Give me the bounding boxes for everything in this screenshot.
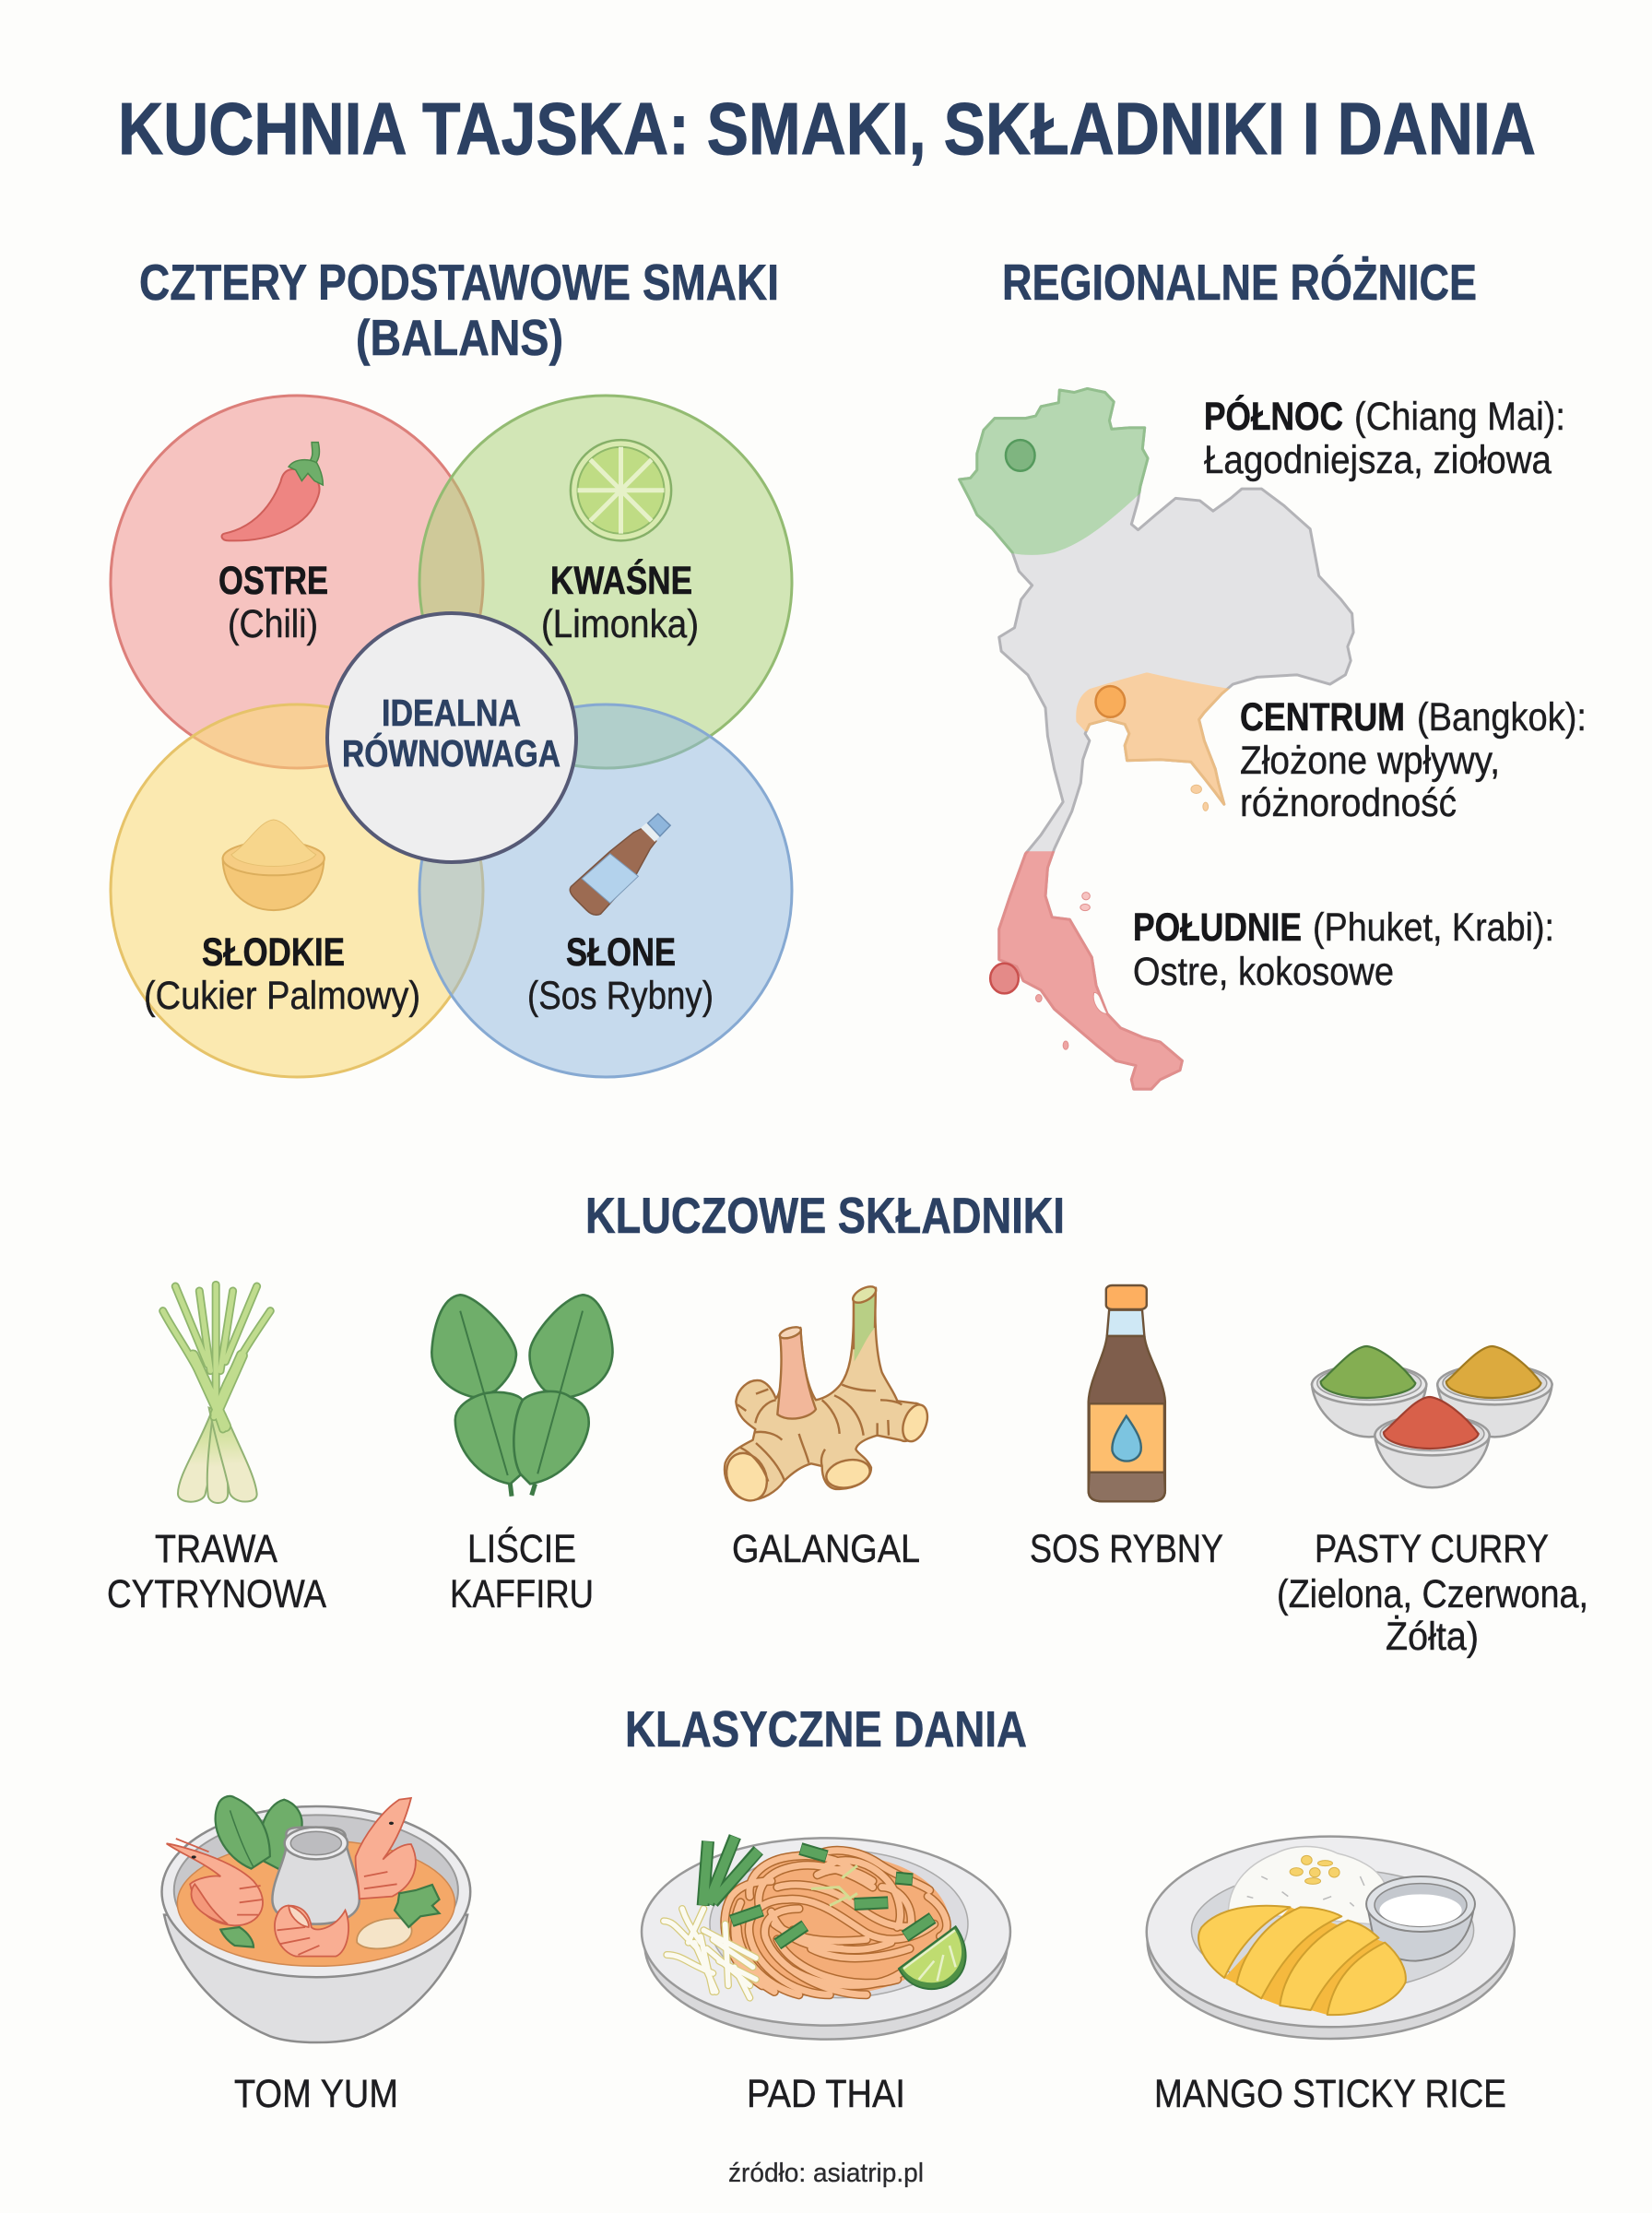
label: lemongrass: CYTRYNOWA <box>107 1572 326 1616</box>
dish: mango sticky rice <box>1147 1837 1515 2039</box>
label: sweet <box>144 930 420 1018</box>
label: curry pastes <box>1277 1527 1588 1659</box>
icon: lime <box>571 440 671 540</box>
icon: lemongrass <box>163 1284 270 1503</box>
label: lemongrass: TRAWA <box>155 1527 277 1571</box>
mango slices <box>1198 1906 1406 2015</box>
region text: north <box>1204 394 1565 482</box>
region text: south <box>1133 905 1554 994</box>
icon: galangal <box>719 1284 932 1508</box>
label: kaffir leaves: LIŚCIE <box>467 1526 576 1571</box>
heading: key ingredients: KLUCZOWE SKŁADNIKI <box>585 1187 1065 1244</box>
label: sweet: SŁODKIE <box>202 930 345 975</box>
label: mango sticky rice: MANGO STICKY RICE <box>1154 2072 1506 2116</box>
label: sour <box>541 558 699 646</box>
label: salty: SŁONE <box>566 930 676 975</box>
region text: central: Złożone wpływy, <box>1240 739 1500 783</box>
bean sprouts <box>664 1909 756 1998</box>
region text: central: (Bangkok): <box>1417 695 1587 740</box>
region: north <box>958 387 1149 555</box>
heading: four tastes <box>139 254 779 366</box>
marker: Phuket <box>990 964 1019 993</box>
panel: taste venn diagram <box>111 396 792 1077</box>
label: kaffir leaves: KAFFIRU <box>450 1572 594 1616</box>
region text: south: POŁUDNIE <box>1133 905 1302 950</box>
marker: Bangkok <box>1096 686 1125 717</box>
region text: north: Łagodniejsza, ziołowa <box>1204 438 1552 482</box>
region text: north: PÓŁNOC <box>1204 394 1343 439</box>
shrimp front <box>275 1906 348 1957</box>
label: curry pastes: PASTY CURRY <box>1315 1527 1549 1571</box>
labels: ingredients <box>107 1526 1588 1659</box>
herb piece <box>220 1927 254 1947</box>
icon: sugar bowl <box>223 820 324 910</box>
shrimp left <box>167 1839 263 1925</box>
lime wedge <box>899 1926 966 1989</box>
region text: central: różnorodność <box>1240 781 1457 825</box>
label: pad thai: PAD THAI <box>747 2072 905 2116</box>
bowl: yellow paste <box>1437 1346 1552 1437</box>
label: fish sauce: SOS RYBNY <box>1030 1527 1223 1571</box>
coconut milk bowl <box>1366 1876 1475 1961</box>
label: salty: (Sos Rybny) <box>527 974 714 1018</box>
circle: sour <box>419 396 792 768</box>
shrimp right <box>356 1798 416 1899</box>
label: curry pastes: (Zielona, Czerwona, <box>1277 1572 1588 1616</box>
marker: Chiang Mai <box>1006 440 1035 471</box>
label: spicy <box>218 559 328 646</box>
center circle: ideal balance: RÓWNOWAGA <box>342 732 560 775</box>
icon: fish sauce bottle <box>1089 1285 1165 1501</box>
mushroom <box>357 1918 412 1948</box>
sticky rice <box>1229 1846 1385 1924</box>
label: sweet: (Cukier Palmowy) <box>144 974 420 1018</box>
bowl: red paste <box>1375 1397 1490 1487</box>
icon: salty bottle <box>570 813 670 915</box>
basil leaves <box>216 1796 302 1872</box>
map of Thailand <box>960 388 1353 1089</box>
heading: four tastes: CZTERY PODSTAWOWE SMAKI <box>139 254 779 311</box>
region: south <box>997 851 1184 1091</box>
label: salty <box>527 930 714 1018</box>
source note: źródło: asiatrip.pl <box>728 2159 924 2188</box>
hot pot chimney <box>272 1828 360 1924</box>
heading: classic dishes: KLASYCZNE DANIA <box>625 1700 1027 1757</box>
cilantro <box>395 1885 440 1927</box>
dish: pad thai <box>642 1837 1010 2040</box>
region text: central: CENTRUM <box>1240 695 1405 740</box>
herb <box>811 1865 857 1906</box>
region: central <box>1076 672 1230 806</box>
region text: south: Ostre, kokosowe <box>1133 950 1394 994</box>
icon: kaffir leaves <box>431 1295 613 1497</box>
label: kaffir leaves <box>450 1526 594 1616</box>
scallions <box>703 1837 933 1944</box>
region text: central <box>1240 695 1587 825</box>
region text: north: (Chiang Mai): <box>1354 395 1565 439</box>
region text: south: (Phuket, Krabi): <box>1313 905 1554 950</box>
label: curry pastes: Żółta) <box>1386 1615 1479 1659</box>
bowl: green paste <box>1312 1346 1426 1437</box>
label: sour: KWAŚNE <box>550 558 692 603</box>
center circle: ideal balance <box>327 613 576 862</box>
circle: sweet <box>111 704 483 1077</box>
dish: tom yum <box>162 1796 470 2042</box>
labels: dishes <box>234 2072 1506 2116</box>
heading: four tastes: (BALANS) <box>356 309 563 366</box>
icon: chili <box>222 443 323 540</box>
heading: regional differences: REGIONALNE RÓŻNICE <box>1002 254 1477 311</box>
label: galangal: GALANGAL <box>732 1527 920 1571</box>
label: sour: (Limonka) <box>541 602 699 646</box>
noodles <box>725 1851 947 1994</box>
circle: spicy <box>111 396 483 768</box>
islands and bay <box>1035 785 1209 1049</box>
label: spicy: OSTRE <box>218 559 328 603</box>
icon: curry pastes <box>1312 1346 1552 1487</box>
circle: salty <box>419 704 792 1077</box>
label: lemongrass <box>107 1527 326 1616</box>
label: tom yum: TOM YUM <box>234 2072 398 2116</box>
center circle: ideal balance: IDEALNA <box>382 692 521 734</box>
label: spicy: (Chili) <box>228 602 318 646</box>
